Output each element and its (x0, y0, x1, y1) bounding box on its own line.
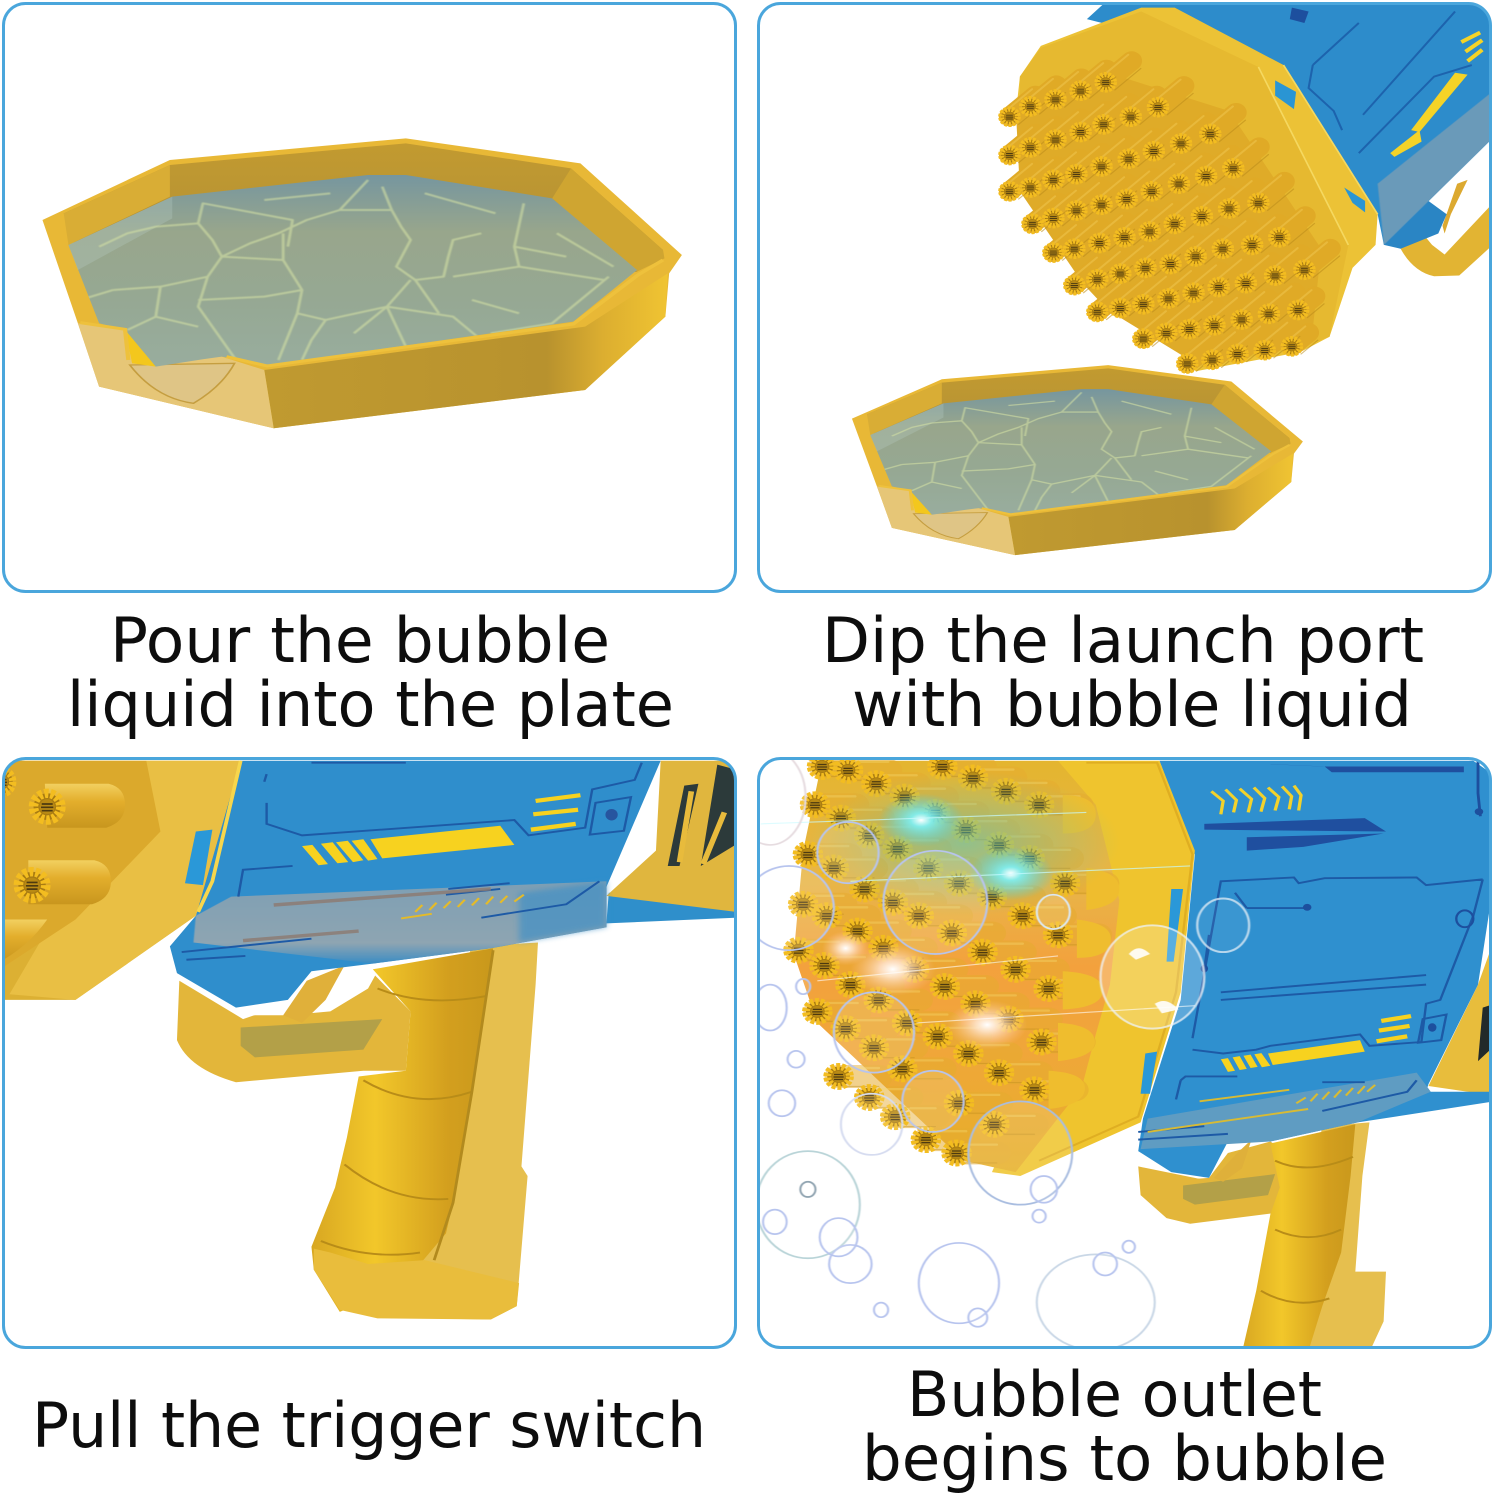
image: gun handle close-up (0, 761, 739, 1319)
grid of lit bubble wands (787, 757, 1119, 1163)
image: gun firing bubbles (735, 749, 1495, 1352)
barrels (1006, 55, 1340, 371)
panel: step 3 pull trigger (0, 758, 739, 1348)
image: tray with bubble liquid (42, 138, 682, 428)
image: gun muzzle above tray (852, 0, 1496, 555)
panel: step 1 pour liquid (4, 4, 736, 592)
caption: step 3: Pull the trigger switch (32, 1389, 706, 1462)
caption: step 1: liquid into the plate (67, 668, 674, 741)
grid of bubble wands (1001, 55, 1340, 371)
caption: step 2: with bubble liquid (852, 668, 1412, 741)
caption: step 4: begins to bubble (862, 1422, 1387, 1495)
caption: step 1 (67, 604, 674, 741)
caption: step 2: Dip the launch port (822, 604, 1424, 677)
soap bubbles (735, 749, 1249, 1350)
panel: step 4 bubbles (735, 749, 1495, 1352)
caption: step 2 (822, 604, 1424, 741)
wand tips (1001, 75, 1313, 371)
panel: step 2 dip launch port (758, 0, 1496, 592)
barrels (798, 758, 1119, 1163)
wand tips (787, 757, 1076, 1163)
caption: step 4: Bubble outlet (907, 1358, 1322, 1431)
caption: step 1: Pour the bubble (110, 604, 610, 677)
caption: step 4 (862, 1358, 1387, 1495)
